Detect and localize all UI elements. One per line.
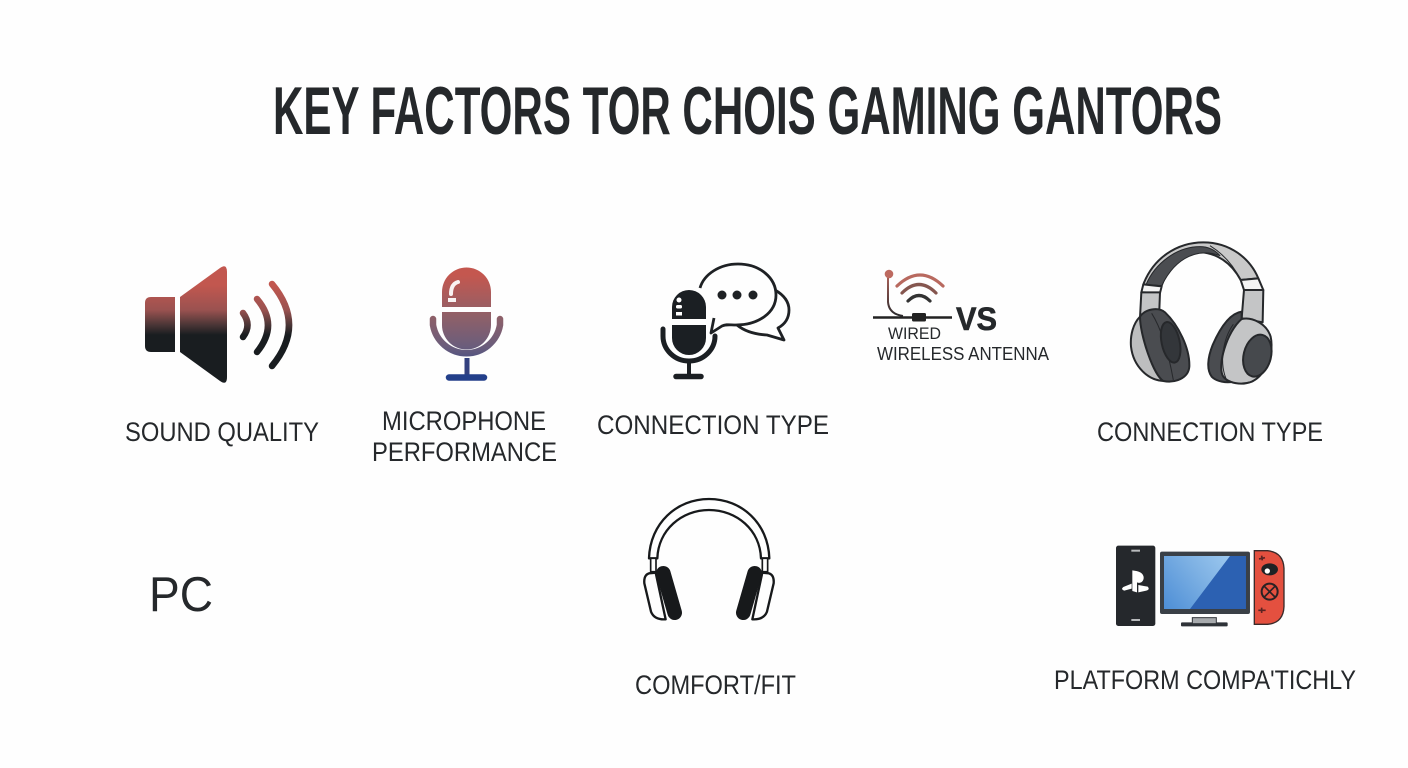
icon: console, monitor and controller <box>1116 546 1284 626</box>
panel: platform compatibility <box>1054 546 1356 695</box>
icon: grey over-ear headphones <box>1131 242 1276 384</box>
label: wired: WIRED <box>888 324 941 343</box>
label: connection type: CONNECTION TYPE <box>1097 417 1323 447</box>
label: microphone performance <box>372 406 557 467</box>
label: microphone performance: PERFORMANCE <box>372 437 557 467</box>
panel: connection type (headphones) <box>1097 242 1323 447</box>
label: wireless antenna: WIRELESS ANTENNA <box>877 344 1049 364</box>
panel: wired vs wireless <box>873 270 1049 364</box>
label: connection type: CONNECTION TYPE <box>597 410 829 440</box>
icon: monitor <box>1160 552 1250 626</box>
icon: console tower <box>1116 546 1155 626</box>
label: vs: VS <box>956 301 997 337</box>
label: sound quality: SOUND QUALITY <box>125 417 319 447</box>
label: platform compatibility: PLATFORM COMPA'TICHLY <box>1054 665 1356 695</box>
icon: antenna with cable <box>873 270 952 322</box>
icon: outline headphones <box>644 499 774 619</box>
panel: sound quality <box>125 266 319 447</box>
panel: connection type (mic and chat) <box>597 264 829 440</box>
panel: microphone performance <box>372 268 557 467</box>
icon: controller <box>1254 551 1284 624</box>
label: comfort/fit: COMFORT/FIT <box>635 670 796 700</box>
icon: microphone with speech bubbles <box>663 264 789 376</box>
panel: comfort and fit <box>635 499 796 700</box>
icon: speaker <box>145 266 289 383</box>
label: microphone performance: MICROPHONE <box>382 406 546 436</box>
label: pc: PC <box>149 568 213 622</box>
icon: gradient microphone <box>433 268 500 378</box>
